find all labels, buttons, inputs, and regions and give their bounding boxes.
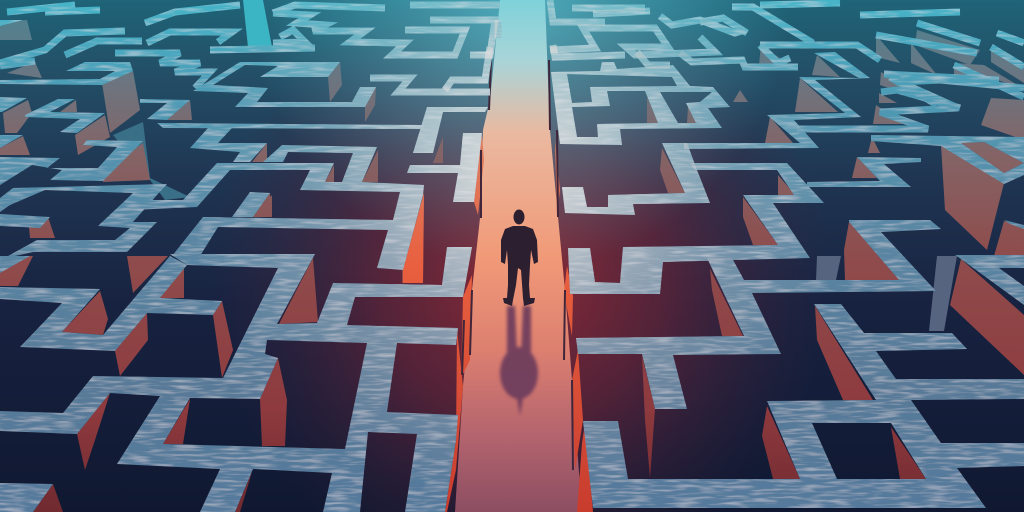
distant bright teal gap bbox=[243, 0, 272, 47]
man standing bbox=[501, 210, 538, 306]
far wall tops bbox=[0, 0, 1024, 129]
dark wall edges along the path bbox=[462, 60, 573, 470]
far wall top highlight glow bbox=[0, 0, 1024, 129]
figure shadow bbox=[500, 306, 538, 416]
head bbox=[514, 210, 524, 224]
floor gaps lower right bbox=[816, 256, 957, 331]
cyan haze at the far end bbox=[0, 0, 1024, 300]
bright red wall faces beside the path bbox=[403, 135, 593, 512]
central path bbox=[455, 0, 582, 512]
suited body bbox=[501, 226, 538, 306]
floor gap upper left bbox=[113, 122, 190, 200]
